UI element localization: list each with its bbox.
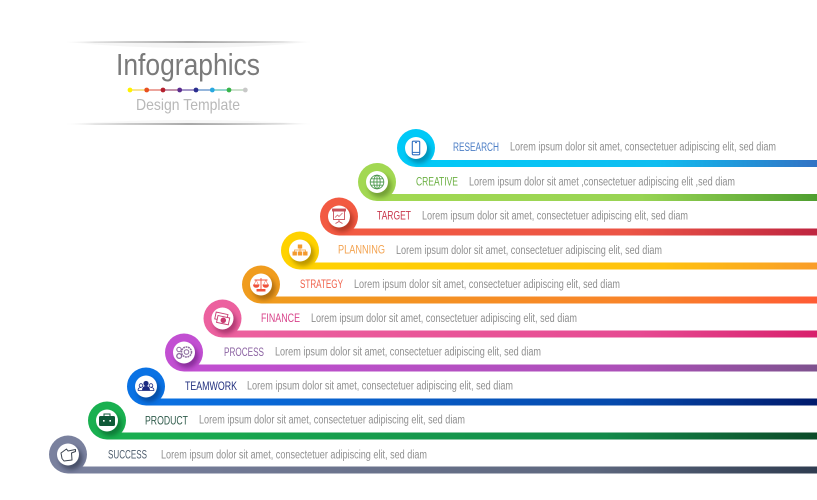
icon: presentation board: [332, 209, 346, 224]
label: teamwork: TEAMWORK: [185, 381, 237, 393]
description: process: Lorem ipsum dolor sit amet, consectetuer adipiscing elit, sed diam: [275, 346, 541, 358]
step: target: [320, 198, 817, 236]
subheading: Design Template: [136, 97, 240, 114]
step: finance: [204, 300, 817, 338]
label: creative: CREATIVE: [416, 176, 458, 188]
step: success: [49, 436, 817, 474]
icon: smartphone: [412, 141, 420, 155]
step: planning: [281, 232, 817, 270]
description: planning: Lorem ipsum dolor sit amet, consectetuer adipiscing elit, sed diam: [396, 245, 662, 257]
step: research: [397, 129, 817, 167]
description: success: Lorem ipsum dolor sit amet, consectetuer adipiscing elit, sed diam: [161, 450, 427, 462]
step: creative: [358, 163, 817, 201]
label: target: TARGET: [377, 210, 411, 222]
label: process: PROCESS: [224, 347, 264, 359]
label: success: SUCCESS: [108, 450, 147, 462]
icon: team of people: [138, 381, 154, 390]
label: planning: PLANNING: [338, 244, 385, 256]
heading: Infographics: [116, 47, 260, 82]
icon: money: [215, 312, 230, 325]
step: teamwork: [127, 368, 817, 406]
step: strategy: [242, 266, 817, 304]
label: product: PRODUCT: [145, 416, 188, 428]
title panel: [65, 41, 312, 125]
label: research: RESEARCH: [453, 142, 499, 154]
description: product: Lorem ipsum dolor sit amet, consectetuer adipiscing elit, sed diam: [199, 414, 465, 426]
step: product: [88, 402, 817, 440]
description: strategy: Lorem ipsum dolor sit amet, consectetuer adipiscing elit, sed diam: [354, 279, 620, 291]
icon: org chart: [292, 244, 308, 256]
step: process: [165, 334, 817, 372]
icon: briefcase: [99, 414, 115, 426]
icon: globe: [370, 175, 384, 189]
label: strategy: STRATEGY: [300, 279, 343, 291]
icon: gears: [177, 347, 192, 358]
label: finance: FINANCE: [261, 313, 300, 325]
description: finance: Lorem ipsum dolor sit amet, consectetuer adipiscing elit, sed diam: [311, 313, 577, 325]
colored dot timeline: [128, 88, 248, 92]
icon: balance scale: [254, 278, 268, 291]
description: teamwork: Lorem ipsum dolor sit amet, consectetuer adipiscing elit, sed diam: [247, 380, 513, 392]
icon: pointing hand: [61, 449, 76, 461]
description: target: Lorem ipsum dolor sit amet, consectetuer adipiscing elit, sed diam: [422, 210, 688, 222]
description: creative: Lorem ipsum dolor sit amet ,consectetuer adipiscing elit ,sed diam: [469, 176, 735, 188]
